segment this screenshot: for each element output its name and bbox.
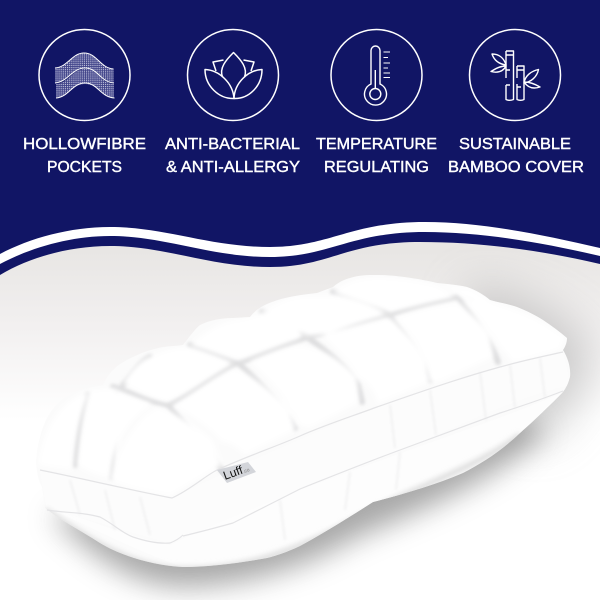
white wave <box>0 222 600 264</box>
gusset gathers <box>70 358 545 540</box>
label: hollowfibre pockets: HOLLOWFIBRE <box>23 136 146 153</box>
pillow <box>36 275 570 569</box>
pillow label tag: Luff.co <box>221 461 251 483</box>
icon: lotus <box>188 30 278 120</box>
icon: thermometer <box>331 30 422 120</box>
label: temperature regulating <box>316 136 437 176</box>
pillow lower edge shade <box>45 435 520 569</box>
label: temperature regulating: REGULATING <box>324 159 429 176</box>
cushion valleys <box>75 292 498 477</box>
gusset panel <box>567 380 569 385</box>
label: sustainable bamboo cover: SUSTAINABLE <box>459 136 571 153</box>
icon: hollowfibre pockets <box>39 30 130 120</box>
piping lines <box>40 352 563 543</box>
puffy cushions <box>72 290 494 480</box>
pillow label tag <box>217 461 256 483</box>
label: sustainable bamboo cover <box>448 136 584 176</box>
pillow shadow <box>50 285 591 587</box>
label: anti-bacterial and anti-allergy: ANTI-BACTERIAL <box>165 136 300 153</box>
label: hollowfibre pockets <box>23 136 146 176</box>
label: sustainable bamboo cover: BAMBOO COVER <box>448 159 584 176</box>
icon: bamboo <box>470 30 560 120</box>
label: hollowfibre pockets: POCKETS <box>47 159 122 176</box>
label: anti-bacterial and anti-allergy: & ANTI-ALLERGY <box>166 159 300 176</box>
label: anti-bacterial and anti-allergy <box>165 136 300 176</box>
label: temperature regulating: TEMPERATURE <box>316 136 437 153</box>
navy header band <box>0 0 600 275</box>
